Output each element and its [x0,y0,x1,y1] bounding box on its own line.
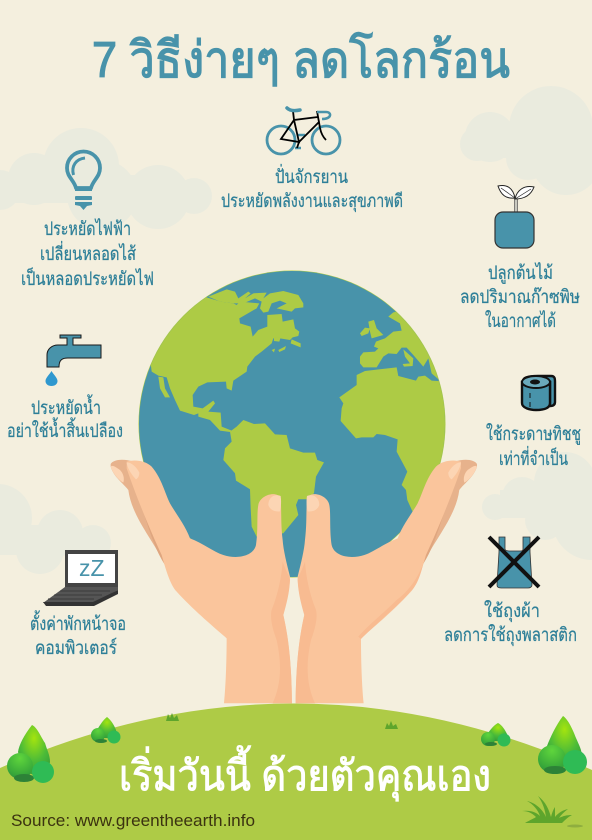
zZ sleep text: zZ [79,555,105,581]
hill [0,703,592,840]
south america [223,420,324,537]
bush: left large [7,725,54,783]
label: plant trees: ในอากาศได้ [485,310,556,331]
label: light bulb [21,218,154,289]
globe [130,270,447,578]
right hand [296,460,477,703]
label: cloth bag: ใช้ถุงผ้า [484,600,540,623]
cloud: top left [0,128,212,230]
bush: right small [481,723,510,746]
water drop [46,371,58,386]
africa [339,367,447,513]
bush: right large [538,716,587,774]
label: light bulb: เปลี่ยนหลอดไส้ [40,241,136,264]
bush: left small [91,717,120,744]
label: tissue: เท่าที่จำเป็น [499,446,568,469]
label: save water: อย่าใช้น้ำสิ้นเปลือง [7,417,123,441]
uk and ireland [360,320,383,338]
hands holding globe [111,460,477,703]
title: 7 วิธีง่ายๆ ลดโลกร้อน [92,32,510,88]
source: Source: www.greentheearth.info [11,811,255,830]
call to action: เริ่มวันนี้ ด้วยตัวคุณเอง [119,745,491,802]
label: cloth bag [444,600,577,647]
label: computer sleep: ตั้งค่าพักหน้าจอ [30,610,126,634]
grass tufts [166,713,583,828]
icon: light bulb [67,152,100,210]
label: tissue [486,423,581,469]
cloud: right lower [482,452,592,560]
label: computer sleep [30,610,126,658]
europe [360,312,438,380]
continent: north america [151,297,300,432]
left hand [111,460,292,703]
icon: laptop sleeping [43,550,118,606]
baja [158,377,170,397]
label: computer sleep: คอมพิวเตอร์ [35,637,117,658]
label: bicycle [221,164,403,213]
label: plant trees [460,262,580,331]
arctic islands [208,289,303,313]
icon: bicycle [267,108,340,154]
newfoundland [272,337,301,352]
label: light bulb: เป็นหลอดประหยัดไฟ [21,266,154,289]
label: light bulb: ประหยัดไฟฟ้า [44,218,131,239]
label: bicycle: ปั่นจักรยาน [275,164,348,187]
label: save water: ประหยัดน้ำ [31,394,101,418]
italy [403,349,413,367]
cloud: left middle [0,484,111,574]
cloud: top right [460,86,592,195]
icon: crossed out plastic bag [489,537,539,588]
large grass tuft [522,796,572,823]
icon: water tap [46,335,101,386]
label: bicycle: ประหยัดพลังงานและสุขภาพดี [221,190,403,213]
icon: potted plant [495,186,534,248]
label: plant trees: ปลูกต้นไม้ [488,262,553,284]
label: save water [7,394,123,441]
icon: toilet paper roll [522,376,555,410]
